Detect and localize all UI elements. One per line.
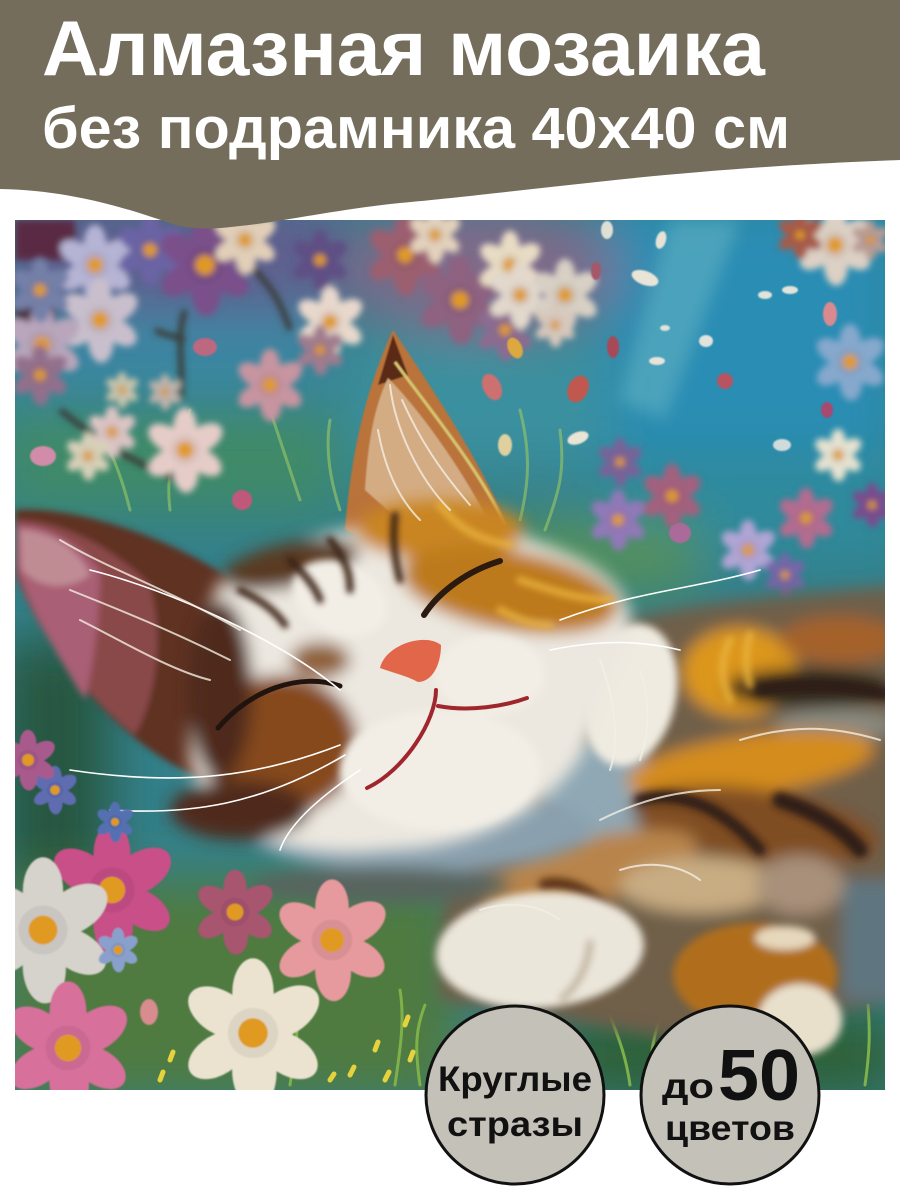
cat: left ear xyxy=(15,504,232,780)
painted background colour fields xyxy=(0,200,900,1100)
title: Алмазная мозаика xyxy=(42,4,766,92)
cat: white chest tuft xyxy=(584,618,684,771)
subtitle: без подрамника 40х40 см xyxy=(42,96,790,161)
cat: white forehead and muzzle xyxy=(288,554,532,828)
badge: up to 50 colours: до xyxy=(662,1067,714,1106)
whiskers xyxy=(70,570,760,850)
badge: up to 50 colours xyxy=(641,1006,819,1184)
nose xyxy=(380,640,441,682)
cat illustration xyxy=(15,330,900,1056)
cat: head stripes xyxy=(240,515,400,625)
right closed eye xyxy=(424,561,500,615)
cat: rear paw xyxy=(673,923,842,1056)
cat: head xyxy=(170,500,630,852)
badge: round rhinestones xyxy=(426,1006,604,1184)
painting: sleeping cat in flowers xyxy=(0,200,900,1116)
badge: round rhinestones: стразы xyxy=(447,1105,583,1144)
badge: up to 50 colours: 50 xyxy=(718,1036,800,1116)
mouth xyxy=(367,690,527,788)
foreground flowers xyxy=(15,728,387,1090)
header band xyxy=(0,0,900,228)
left closed eye xyxy=(218,681,340,728)
falling petals xyxy=(30,221,837,1025)
cat: golden highlights xyxy=(440,505,750,700)
cat: fur neck xyxy=(250,788,590,903)
cat: fur strokes xyxy=(60,385,880,920)
cat: front paw xyxy=(432,885,648,1015)
cat: body xyxy=(439,585,900,1040)
cat: tabby stripes xyxy=(545,686,885,915)
light ray xyxy=(620,220,740,420)
badge: up to 50 colours: цветов xyxy=(665,1109,795,1148)
cat: face xyxy=(70,561,760,850)
badge: round rhinestones: Круглые xyxy=(438,1060,592,1099)
cat: top ear xyxy=(344,330,506,536)
blossom branches xyxy=(0,205,895,598)
grass blades xyxy=(95,410,869,1085)
